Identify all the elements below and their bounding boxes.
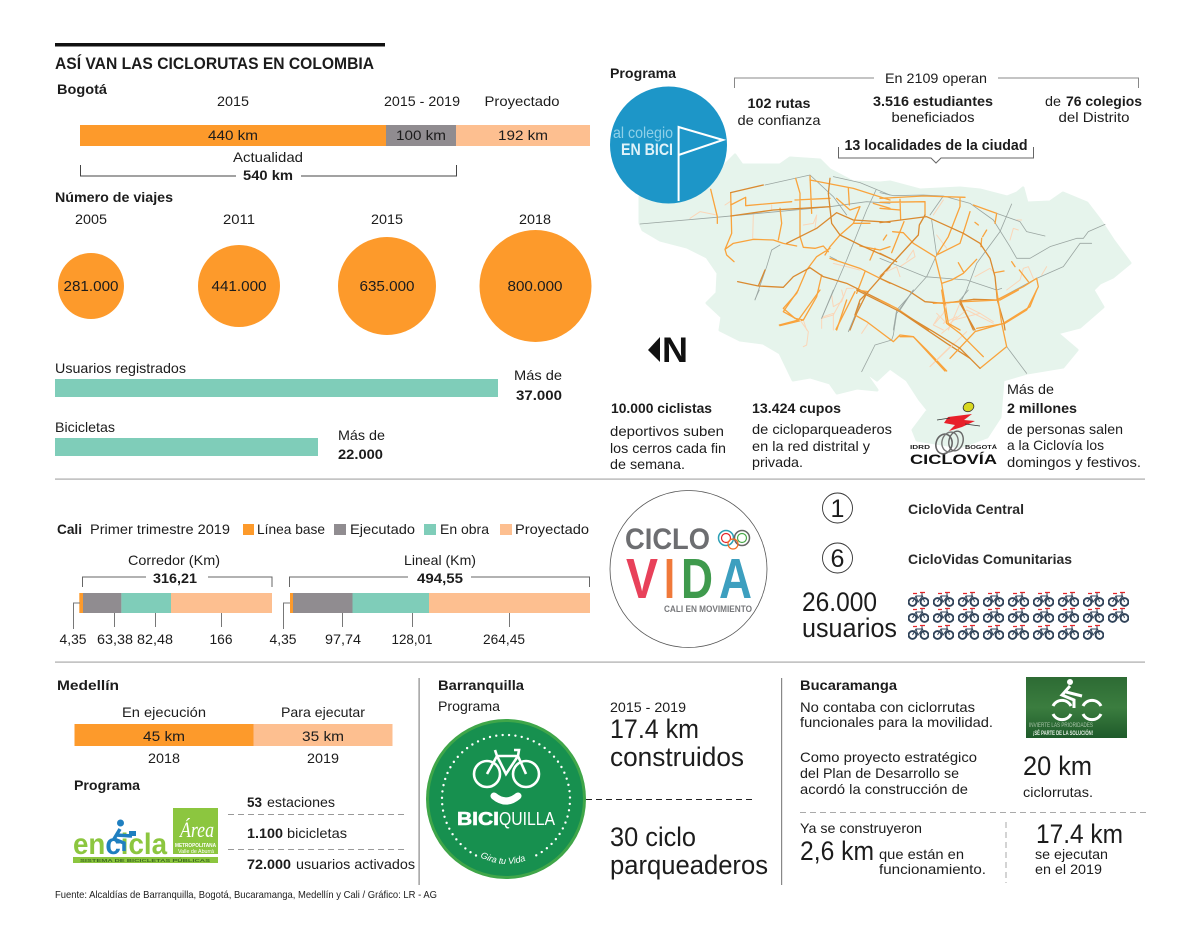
logo: al colegio en bici: EN BICI xyxy=(621,141,673,159)
stat: 102 rutas: 102 rutas xyxy=(748,95,811,111)
logo: ciclovía: IDRD xyxy=(910,445,931,451)
panel: Bucaramanga xyxy=(800,677,1150,883)
bar: bicicletas xyxy=(55,419,385,462)
logo: ciclo vida: D xyxy=(681,547,713,611)
stat: 2,6 km xyxy=(800,820,986,877)
panel: Barranquilla xyxy=(426,677,768,880)
stat: ciclovida central: 1 xyxy=(831,495,844,523)
bracket: actualidad 540 km xyxy=(80,149,456,183)
stacked bar: corredor: Corredor (Km) xyxy=(128,552,220,568)
panel: Cali xyxy=(57,490,1128,648)
logo: biciquilla xyxy=(426,719,586,879)
bubble chart: viajes por año: 281.000 xyxy=(64,279,118,295)
heading: programa Medellín: Programa xyxy=(74,777,140,793)
stacked bar: Bogotá km: 2015 - 2019 xyxy=(384,93,460,109)
stat: 17.4 km construidos: 2015 - 2019 xyxy=(610,699,686,715)
stat: ciclistas xyxy=(610,400,726,472)
stacked bar: corredor: 166 xyxy=(210,632,232,647)
heading: número de viajes: Número de viajes xyxy=(55,189,173,205)
list: estaciones, bicicletas, usuarios xyxy=(228,794,415,872)
legend: Proyectado xyxy=(515,521,589,537)
stat: ciclovidas comunitarias: 6 xyxy=(831,545,844,573)
heading: Cali: Primer trimestre 2019 xyxy=(90,522,230,537)
bracket: actualidad 540 km: Actualidad xyxy=(233,149,303,165)
logo: ciclo vida: I xyxy=(664,547,675,611)
stat: 26.000 usuarios: 26.000 xyxy=(802,587,877,617)
stacked bar: corredor: 4,35 xyxy=(60,632,86,647)
logo: biciquilla: QUILLA xyxy=(499,809,555,829)
stat: 2,6 km: Ya se construyeron xyxy=(800,820,922,836)
stacked bar: Bogotá km xyxy=(80,93,590,146)
list: estaciones, bicicletas, usuarios: 1.100 xyxy=(247,825,283,841)
bubble chart: viajes por año: 635.000 xyxy=(360,279,414,295)
stat: cupos: privada. xyxy=(752,454,803,470)
logo: ciclo vida: A xyxy=(719,547,752,611)
panel: Bogotá xyxy=(55,81,592,462)
logo: al colegio en bici: al colegio xyxy=(613,125,673,142)
icon: north arrow xyxy=(648,331,688,370)
stat: 30 ciclo parqueaderos xyxy=(610,822,768,880)
text block: proyecto estratégico: Como proyecto estratégico xyxy=(800,749,977,765)
stat: estudiantes xyxy=(873,93,993,125)
text block: sin ciclorrutas: No contaba con ciclorrutas xyxy=(800,699,975,715)
logo: ciclovía: CICLOVÍA xyxy=(910,452,997,467)
title xyxy=(55,43,385,73)
text block: sin ciclorrutas: funcionales para la movilidad. xyxy=(800,714,993,730)
stat: colegios: del Distrito xyxy=(1058,109,1130,125)
stat: 2 millones: de personas salen xyxy=(1007,421,1123,437)
list: estaciones, bicicletas, usuarios: bicicletas xyxy=(287,825,347,841)
logo: encicla: encicla xyxy=(73,828,167,861)
stat: ciclovida central: CicloVida Central xyxy=(908,501,1024,517)
heading: Bogotá: Bogotá xyxy=(57,81,107,97)
label: programa: Programa xyxy=(438,698,500,714)
stat: ciclovidas comunitarias: CicloVidas Comunitarias xyxy=(908,551,1072,567)
stat: ciclovida central xyxy=(822,493,1024,523)
bar: usuarios registrados xyxy=(55,360,562,403)
stat: 17.4 km construidos: 17.4 km xyxy=(610,714,699,744)
heading: Cali: Cali xyxy=(57,521,82,537)
stat: 17.4 km se ejecutan: 17.4 km xyxy=(1036,819,1123,849)
stacked bar: corredor: 63,38 xyxy=(97,632,133,647)
stat: 17.4 km construidos: construidos xyxy=(610,742,744,772)
stat: 20 km xyxy=(1023,751,1093,800)
stacked bar: lineal: Lineal (Km) xyxy=(404,552,476,568)
stat: ciclistas: los cerros cada fin xyxy=(610,440,726,456)
stat: 102 rutas xyxy=(738,95,821,128)
heading: Barranquilla: Barranquilla xyxy=(438,677,524,693)
stat: colegios: de xyxy=(1045,93,1061,109)
panel: Medellín xyxy=(57,677,415,872)
stat: 26.000 usuarios: usuarios xyxy=(802,613,897,643)
stat: colegios xyxy=(1045,93,1142,125)
list: estaciones, bicicletas, usuarios: usuarios activados xyxy=(296,856,415,872)
logo: área metropolitana: Valle de Aburrá xyxy=(178,849,214,855)
stat: ciclovidas comunitarias xyxy=(822,543,1072,573)
stat: cupos: de cicloparqueaderos xyxy=(752,421,892,437)
bubble chart: viajes por año: 800.000 xyxy=(508,279,562,295)
stat: cupos: en la red distrital y xyxy=(752,438,870,454)
bubble chart: viajes por año: 441.000 xyxy=(212,279,266,295)
stat: 2,6 km: que están en xyxy=(879,846,964,862)
logo: encicla xyxy=(73,820,218,863)
heading: Medellín: Medellín xyxy=(57,677,119,693)
stat: estudiantes: beneficiados xyxy=(892,109,974,125)
legend: En obra xyxy=(440,521,489,537)
legend xyxy=(243,521,589,537)
bubble chart: viajes por año: 2005 xyxy=(75,211,107,227)
stacked bar: Medellín km: 45 km xyxy=(143,728,185,744)
stat: 2 millones xyxy=(1007,381,1141,470)
stat: 17.4 km se ejecutan: se ejecutan xyxy=(1035,846,1108,862)
text block: proyecto estratégico: acordó la construcción de xyxy=(800,781,968,797)
stacked bar: lineal xyxy=(270,552,590,647)
stat: 2 millones: Más de xyxy=(1007,381,1054,397)
icon: north arrow: N xyxy=(662,331,688,370)
stacked bar: corredor xyxy=(60,552,272,647)
stacked bar: Bogotá km: 100 km xyxy=(396,127,446,143)
stat: cupos: 13.424 cupos xyxy=(752,400,841,416)
text block: sin ciclorrutas xyxy=(800,699,993,730)
stat: 2,6 km: funcionamiento. xyxy=(879,861,986,877)
stat: estudiantes: 3.516 estudiantes xyxy=(873,93,993,109)
panel: programa al colegio en bici xyxy=(610,65,1142,472)
stat: ciclistas: deportivos suben xyxy=(610,423,724,439)
logo: área metropolitana: Área xyxy=(178,817,214,842)
pictogram: bicycles xyxy=(909,592,1128,639)
stat: 2 millones: domingos y festivos. xyxy=(1007,454,1141,470)
bar: usuarios registrados: 37.000 xyxy=(516,387,562,403)
logo: ciclo vida: CALI EN MOVIMIENTO xyxy=(664,604,752,614)
callout: 13 localidades: 13 localidades de la ciudad xyxy=(844,138,1028,154)
stat: 17.4 km construidos xyxy=(610,699,744,772)
stacked bar: Bogotá km: 440 km xyxy=(208,127,258,143)
heading: Bucaramanga: Bucaramanga xyxy=(800,677,897,693)
stat: 2 millones: a la Ciclovía los xyxy=(1007,437,1104,453)
bracket: en 2109 operan xyxy=(734,70,1138,88)
stacked bar: corredor: 82,48 xyxy=(137,632,173,647)
logo: Bucaramanga badge: ¡SÉ PARTE DE LA SOLUCIÓN! xyxy=(1033,729,1093,737)
stacked bar: Bogotá km: 192 km xyxy=(498,127,548,143)
list: estaciones, bicicletas, usuarios: estaciones xyxy=(267,794,335,810)
legend: Línea base xyxy=(257,521,325,537)
bar: bicicletas: Más de xyxy=(338,427,385,443)
callout: 13 localidades xyxy=(838,138,1034,163)
logo: Bucaramanga badge: INVIERTE LAS PRIORIDADES xyxy=(1029,723,1093,729)
source note: Fuente: Alcaldías de Barranquilla, Bogotá, Bucaramanga, Medellín y Cali / Gráfico: LR - AG xyxy=(55,889,437,901)
logo: Bucaramanga badge xyxy=(1026,677,1127,738)
heading: programa: Programa xyxy=(610,65,676,81)
bubble chart: viajes por año xyxy=(58,211,592,342)
bar: usuarios registrados: Más de xyxy=(514,367,562,383)
stat: 2,6 km: 2,6 km xyxy=(800,836,874,866)
bar: usuarios registrados: Usuarios registrados xyxy=(55,360,186,376)
stat: 30 ciclo parqueaderos: 30 ciclo xyxy=(610,822,696,852)
logo: ciclo vida xyxy=(610,490,767,648)
list: estaciones, bicicletas, usuarios: 53 xyxy=(247,794,262,810)
stacked bar: Medellín km: En ejecución xyxy=(122,704,206,720)
stacked bar: Medellín km xyxy=(74,704,392,766)
title: ASÍ VAN LAS CICLORUTAS EN COLOMBIA xyxy=(55,54,374,73)
stacked bar: lineal: 4,35 xyxy=(270,632,296,647)
stacked bar: Medellín km: 2018 xyxy=(148,750,180,766)
bracket: en 2109 operan: En 2109 operan xyxy=(885,70,987,86)
logo: ciclovía xyxy=(910,401,998,467)
stacked bar: Bogotá km: Proyectado xyxy=(484,93,560,109)
stat: colegios: 76 colegios xyxy=(1066,93,1142,109)
stacked bar: Medellín km: Para ejecutar xyxy=(281,704,365,720)
text block: proyecto estratégico xyxy=(800,749,977,797)
logo: biciquilla: BICI xyxy=(457,809,499,829)
bracket: actualidad 540 km: 540 km xyxy=(243,167,293,183)
map of Bogotá bike routes xyxy=(640,155,1130,447)
text block: proyecto estratégico: del Plan de Desarrollo se xyxy=(800,765,959,781)
logo: biciquilla: Gira tu Vida xyxy=(481,852,526,864)
bar: bicicletas: Bicicletas xyxy=(55,419,115,435)
stacked bar: lineal: 264,45 xyxy=(483,632,525,647)
stacked bar: lineal: 128,01 xyxy=(392,632,432,647)
stacked bar: Bogotá km: 2015 xyxy=(217,93,249,109)
list: estaciones, bicicletas, usuarios: 72.000 xyxy=(247,856,291,872)
stat: 17.4 km se ejecutan xyxy=(1035,819,1123,877)
bar: bicicletas: 22.000 xyxy=(338,446,383,462)
logo: encicla: SISTEMA DE BICICLETAS PÚBLICAS xyxy=(80,857,210,863)
stat: 20 km: 20 km xyxy=(1023,751,1092,781)
stat: 26.000 usuarios xyxy=(802,587,897,643)
bubble chart: viajes por año: 2018 xyxy=(519,211,551,227)
stat: ciclistas: 10.000 ciclistas xyxy=(611,400,712,416)
stat: ciclistas: de semana. xyxy=(610,456,685,472)
stacked bar: Medellín km: 35 km xyxy=(302,728,344,744)
legend: Ejecutado xyxy=(350,521,415,537)
stacked bar: corredor: 316,21 xyxy=(153,570,197,586)
bubble chart: viajes por año: 2015 xyxy=(371,211,403,227)
logo: ciclo vida: V xyxy=(626,547,658,611)
logo: al colegio en bici xyxy=(610,86,727,204)
bubble chart: viajes por año: 2011 xyxy=(223,211,255,227)
stat: cupos xyxy=(752,400,892,470)
logo: área metropolitana: METROPOLITANA xyxy=(175,843,216,849)
stat: 20 km: ciclorrutas. xyxy=(1023,784,1093,800)
stacked bar: Medellín km: 2019 xyxy=(307,750,339,766)
logo: área metropolitana xyxy=(173,808,218,855)
stacked bar: lineal: 494,55 xyxy=(417,570,463,586)
logo: ciclo vida: CICLO xyxy=(625,523,710,556)
stat: 2 millones: 2 millones xyxy=(1007,400,1077,416)
stat: 102 rutas: de confianza xyxy=(738,112,821,128)
stat: 17.4 km se ejecutan: en el 2019 xyxy=(1035,861,1102,877)
stacked bar: lineal: 97,74 xyxy=(325,632,362,647)
logo: ciclovía: BOGOTÁ xyxy=(965,444,998,451)
stat: 30 ciclo parqueaderos: parqueaderos xyxy=(610,850,768,880)
